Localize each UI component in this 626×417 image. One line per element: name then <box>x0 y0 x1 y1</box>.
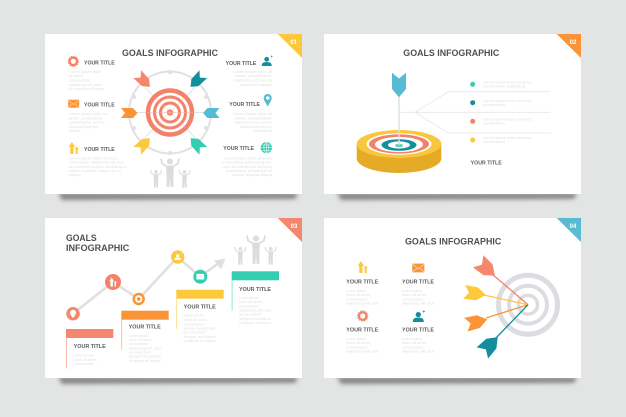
title: INFOGRAPHIC <box>66 243 130 253</box>
step 2 <box>121 311 169 363</box>
list item 1 <box>470 80 532 89</box>
title: GOALS INFOGRAPHIC <box>122 48 218 58</box>
corner tab 03: 03 <box>291 224 298 230</box>
item: right middle: Lorem ipsum dolor sit <box>233 112 272 116</box>
item: left middle: YOUR TITLE <box>84 103 115 109</box>
corner tab 01 <box>278 34 302 58</box>
item: left middle: Lorem ipsum dolor sit <box>69 112 107 116</box>
item: settings: YOUR TITLE <box>346 328 379 334</box>
item: left bottom: Lorem ipsum dolor sit amet, <box>69 156 118 160</box>
3d target disc <box>357 130 441 173</box>
item: right middle <box>229 94 273 133</box>
step 2: YOUR TITLE <box>129 325 161 331</box>
item: right top: amet, consectetur <box>235 74 273 78</box>
step 4: adipiscing elit, sed <box>239 309 271 313</box>
item: left top: Lorem ipsum dolor <box>69 70 103 74</box>
item: person <box>402 310 435 354</box>
item: person: adipiscing elit, sed <box>402 350 434 354</box>
target with arrows <box>121 70 220 155</box>
step 2: ut labore et dolore <box>129 359 161 363</box>
step 1 <box>66 329 113 368</box>
item: person: Lorem ipsum <box>402 337 422 341</box>
item: growth: adipiscing elit, sed <box>346 302 378 306</box>
item: right middle: eiusmod tempor <box>240 125 273 129</box>
step 3 <box>176 290 224 343</box>
item: settings <box>346 311 379 354</box>
item: left top: do eiusmod tempor <box>69 87 106 91</box>
item: left bottom: do eiusmod tempor incididunt ut <box>69 165 127 169</box>
item: settings: Lorem ipsum <box>346 337 366 341</box>
item: right top: YOUR TITLE <box>226 61 257 67</box>
panel: slide 04 <box>324 218 581 378</box>
list item 2 <box>470 99 532 107</box>
item: mail: YOUR TITLE <box>402 279 435 285</box>
item: right middle: amet, consectetur <box>235 116 273 120</box>
step 4: Lorem ipsum <box>239 296 259 300</box>
list item 2: Lorem ipsum dolor sit amet, <box>483 99 532 103</box>
step 2: do eiusmod <box>129 350 151 354</box>
step 2: adipiscing elit, sed <box>129 346 161 350</box>
four arrows <box>463 255 528 358</box>
step 1: consectetur <box>74 362 95 366</box>
item: right bottom: consectetur adipiscing elit, <box>221 161 272 165</box>
item: left bottom <box>69 142 127 177</box>
corner tab 03 <box>278 218 302 242</box>
item: left middle: adipiscing elit, sed do <box>69 121 105 125</box>
step 3: Lorem ipsum <box>184 314 204 318</box>
item: left bottom: labore et dolore magna nisi ut <box>69 169 121 173</box>
step 4: consectetur <box>239 304 260 308</box>
item: right top: adipiscing elit, sed do <box>234 78 272 82</box>
branching lines <box>400 92 551 133</box>
list item 3: Lorem ipsum dolor sit amet, <box>483 118 532 122</box>
list item 1: Lorem ipsum dolor sit amet, <box>483 80 532 84</box>
list item 2: consectetur <box>483 103 506 107</box>
step 2: Lorem ipsum <box>129 334 149 338</box>
step 3: consectetur <box>184 322 205 326</box>
item: left bottom: consectetur adipiscing elit, sed <box>69 161 124 165</box>
panel: slide 03 <box>45 218 302 378</box>
item: growth: YOUR TITLE <box>346 279 379 285</box>
item: person: YOUR TITLE <box>402 328 435 334</box>
item: settings: dolor sit amet, <box>346 341 371 345</box>
list item 3 <box>470 118 532 126</box>
step 4: YOUR TITLE <box>239 287 272 293</box>
panel shadow: slide 2 <box>337 193 577 200</box>
title: GOALS INFOGRAPHIC <box>403 48 500 58</box>
step 1: YOUR TITLE <box>74 344 106 350</box>
milestone icons <box>66 250 207 320</box>
gray target <box>498 275 558 334</box>
panel shadow: slide 1 <box>58 193 298 200</box>
item: right middle: YOUR TITLE <box>229 102 261 108</box>
panel: slide 02 <box>324 34 581 194</box>
step 1: Lorem ipsum <box>74 354 94 358</box>
step 4: tempor incididunt <box>239 317 271 321</box>
item: growth: Lorem ipsum <box>346 289 366 293</box>
item: left middle <box>68 100 115 133</box>
item: right top <box>226 56 273 87</box>
step 4: ut labore et dolore <box>239 321 271 325</box>
step 1: dolor sit amet, <box>74 358 98 362</box>
step 3: ut labore et dolore <box>184 339 216 343</box>
item: left bottom: YOUR TITLE <box>84 147 115 153</box>
list item 4 <box>470 136 532 144</box>
item: left bottom: aliquip <box>69 173 81 177</box>
people illustration <box>235 236 276 265</box>
item: right top: Lorem ipsum dolor sit <box>233 70 272 74</box>
step 4 <box>232 271 279 325</box>
item: growth: dolor sit amet, <box>346 293 371 297</box>
item: right bottom: YOUR TITLE <box>223 146 255 152</box>
step 4: do eiusmod <box>239 313 261 317</box>
item: right middle: incididunt <box>254 129 272 133</box>
item: settings: adipiscing elit, sed <box>346 350 378 354</box>
corner tab 02: 02 <box>570 40 577 46</box>
item: growth <box>346 261 379 306</box>
your title label: YOUR TITLE <box>471 160 502 166</box>
list item 3: consectetur <box>483 122 506 126</box>
step 3: do eiusmod <box>184 331 206 335</box>
corner tab 04 <box>557 218 581 242</box>
item: right top: eiusmod tempor <box>240 83 273 87</box>
title: GOALS <box>66 233 97 243</box>
panel: slide 01 <box>45 34 302 194</box>
item: settings: consectetur <box>346 345 368 349</box>
item: mail: dolor sit amet, <box>402 293 427 297</box>
item: mail: consectetur <box>402 297 424 301</box>
item: right bottom: incididunt ut labore et <box>226 169 272 173</box>
step 2: tempor incididunt <box>129 355 161 359</box>
title: GOALS INFOGRAPHIC <box>405 236 502 246</box>
item: left middle: dolore <box>69 129 81 133</box>
item: right bottom: dolore magna aliqua <box>232 173 272 177</box>
arrow <box>392 73 406 145</box>
step 2: dolor sit amet, <box>129 338 153 342</box>
step 3: dolor sit amet, <box>184 318 208 322</box>
corner tab 01: 01 <box>290 40 298 46</box>
corner tab 02 <box>557 34 581 58</box>
item: mail: Lorem ipsum <box>402 289 422 293</box>
item: mail: adipiscing elit, sed <box>402 302 434 306</box>
list item 1: consectetur adipiscing <box>483 85 525 89</box>
item: left middle: eiusmod tempor <box>69 125 100 129</box>
item: left top: adipiscing elit, sed <box>69 83 101 87</box>
list item 4: Lorem ipsum dolor sit amet, <box>483 136 532 140</box>
item: right middle: adipiscing elit, sed do <box>234 121 272 125</box>
title <box>66 233 130 253</box>
step 2: consectetur <box>129 342 150 346</box>
growth line with arrow <box>73 257 226 314</box>
item: person: consectetur <box>402 345 424 349</box>
corner tab 04: 04 <box>570 224 577 230</box>
panel shadow: slide 4 <box>337 377 577 384</box>
item: right bottom: sed do eiusmod tempor <box>223 165 273 169</box>
item: left top: consectetur <box>69 78 92 82</box>
people illustration <box>150 158 190 188</box>
item: left top: YOUR TITLE <box>84 61 115 67</box>
item: person: dolor sit amet, <box>402 341 427 345</box>
item: left middle: amet, consectetur <box>69 116 104 120</box>
item: left top <box>68 56 115 91</box>
item: mail <box>402 264 435 306</box>
item: left top: sit amet, <box>69 74 84 78</box>
step 3: YOUR TITLE <box>184 304 216 310</box>
item: growth: consectetur <box>346 297 368 301</box>
item: right bottom <box>221 142 273 177</box>
panel shadow: slide 3 <box>58 377 298 384</box>
item: right bottom: Lorem ipsum dolor sit amet, <box>224 156 272 160</box>
list item 4: consectetur <box>483 140 506 144</box>
step 3: adipiscing elit, sed <box>184 326 216 330</box>
step 4: dolor sit amet, <box>239 300 263 304</box>
step 3: tempor incididunt <box>184 335 216 339</box>
